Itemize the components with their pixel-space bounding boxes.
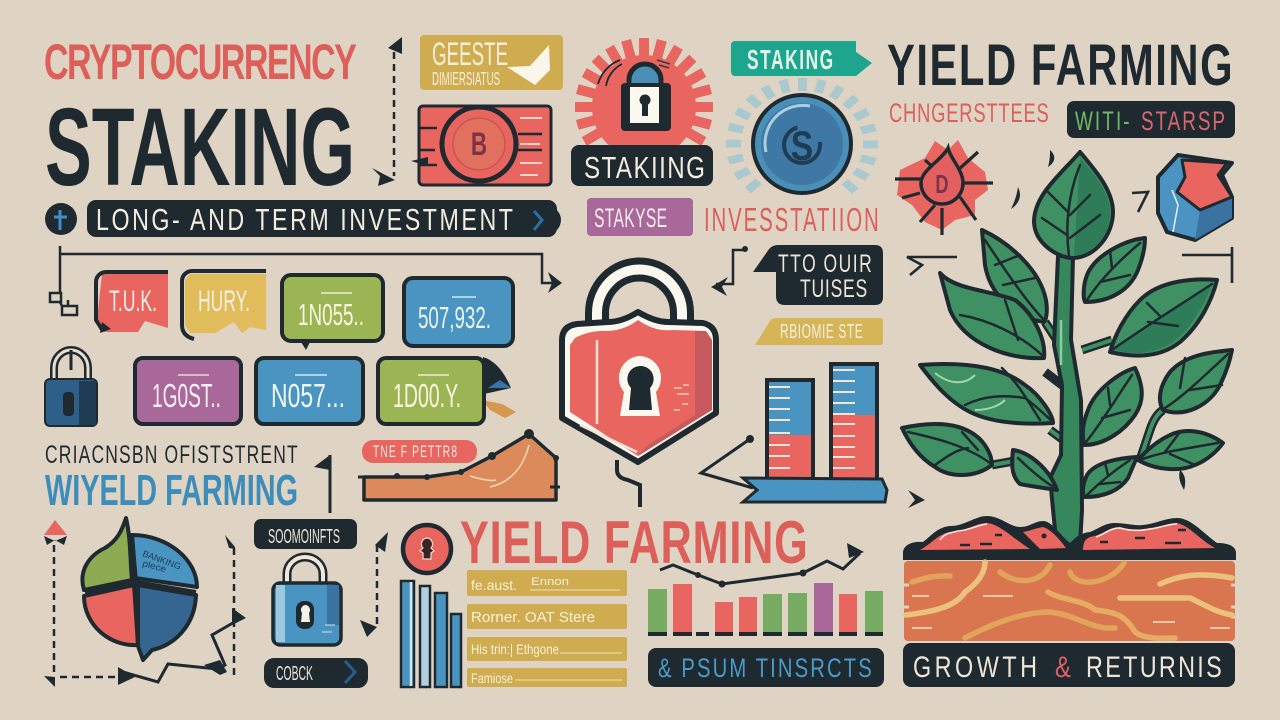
banner: long and term investment: LONG- AND TERM INVESTMENT bbox=[96, 202, 513, 237]
speech bubble: to our tuises: TTO OUIR bbox=[778, 249, 872, 278]
strips: gold text rows: Rorner. OAT Stere bbox=[471, 609, 595, 626]
strips: gold text rows bbox=[467, 570, 627, 687]
pill: with stars: WITI- bbox=[1075, 106, 1130, 136]
bubble: blue second: N057... bbox=[271, 377, 345, 414]
arrow: dashed right bbox=[360, 532, 388, 637]
connector: line to bubbles bbox=[50, 246, 562, 315]
plant branches bbox=[992, 322, 1163, 500]
leaf: upper left bbox=[982, 230, 1047, 322]
pill: stakiing: STAKIING bbox=[584, 150, 705, 185]
ribbon base bbox=[743, 478, 887, 502]
tag: staking teal: STAKING bbox=[747, 44, 833, 75]
strips: gold text rows: His trin:| Ethgone bbox=[471, 641, 559, 657]
icon: red sun with padlock bbox=[575, 38, 713, 159]
strips: gold text rows: fe.aust. bbox=[471, 577, 517, 593]
leaf: far right top bbox=[1160, 350, 1232, 412]
tag: gold regime site: RBIOMIE STE bbox=[780, 321, 863, 343]
title: cryptocurrency: CRYPTOCURRENCY bbox=[44, 35, 357, 91]
badge: gold label bbox=[420, 35, 563, 90]
flag arrow bbox=[314, 455, 330, 513]
icon: red burst with drop coin bbox=[895, 140, 993, 235]
arrow: dashed vertical bbox=[372, 37, 402, 186]
tag: stakyse bbox=[587, 198, 693, 236]
chart: line with arrow bbox=[660, 543, 864, 588]
chart: pie with leaf: plece bbox=[141, 558, 167, 574]
pill: soomoinfts bbox=[254, 519, 357, 549]
bubble: green second: 1D00.Y. bbox=[393, 377, 461, 414]
pill: growth and returns: & bbox=[1055, 649, 1071, 684]
arrow: zigzag bbox=[118, 608, 246, 685]
bubble: purple: 1G0ST.. bbox=[152, 377, 221, 414]
decor arrows around plant bbox=[907, 150, 1233, 508]
bubble: gold bbox=[182, 271, 266, 339]
pill: cobck bbox=[264, 658, 368, 688]
leaf: right lower bbox=[1083, 457, 1137, 497]
icon: blue padlock bbox=[273, 557, 341, 645]
chart: colored bars bbox=[648, 583, 883, 635]
label: chngersttees: CHNGERSTTEES bbox=[889, 97, 1049, 128]
chart: stacked cylinders bbox=[743, 364, 887, 502]
chart: blue vertical bars bbox=[401, 581, 461, 687]
pill: cobck: COBCK bbox=[276, 663, 313, 685]
icon: red burst with drop coin: D bbox=[935, 170, 949, 199]
bubble: gold: HURY. bbox=[198, 285, 250, 318]
strips: gold text rows: Famiose bbox=[471, 670, 513, 686]
speech bubble: to our tuises bbox=[753, 245, 883, 305]
icon: red banknote with bitcoin coin: B bbox=[471, 126, 487, 162]
leaf: top bbox=[1034, 152, 1113, 258]
leaf: far left bbox=[902, 424, 992, 475]
heading: staking: STAKING bbox=[45, 86, 355, 209]
chart: pie with leaf: BANKING bbox=[141, 548, 182, 572]
pill: time of pettrs bbox=[362, 440, 477, 463]
icon: blue box with red arrow bbox=[1158, 155, 1232, 240]
arrow: dashed vertical middle bbox=[225, 535, 235, 678]
bubble: blue bbox=[404, 278, 513, 346]
icon: hat marker bbox=[482, 357, 516, 418]
pill: growth and returns: GROWTH bbox=[913, 650, 1037, 684]
illustration: plant bbox=[902, 152, 1232, 545]
title: yield farming top right: YIELD FARMING bbox=[887, 32, 1233, 98]
bubble: green: 1N055.. bbox=[298, 297, 364, 332]
bubble: green bbox=[282, 275, 383, 350]
icon: red banknote with bitcoin coin bbox=[411, 106, 551, 185]
label: comparison of investment: CRIACNSBN OFISTSTRENT bbox=[45, 440, 298, 469]
tag: staking teal bbox=[731, 41, 872, 76]
leaf: middle left bbox=[920, 364, 1053, 424]
icon: plus badge bbox=[45, 203, 77, 235]
icon: red medal with keyhole bbox=[403, 525, 451, 573]
icon: blue coin with rays: S bbox=[791, 124, 813, 170]
heading: wiyeld farming: WIYELD FARMING bbox=[45, 466, 298, 515]
pill: time of pettrs: TNE F PETTR8 bbox=[373, 441, 457, 461]
bubble: green second bbox=[378, 358, 484, 424]
leaf: right middle bbox=[1083, 368, 1142, 445]
chart: pie with leaf bbox=[82, 518, 197, 660]
tag: gold regime site bbox=[755, 318, 883, 345]
soil strata bbox=[904, 561, 1235, 641]
speech bubble: to our tuises: TUISES bbox=[800, 274, 867, 303]
leaf: second right bbox=[1110, 279, 1217, 356]
pill: psum tinsrcts: & PSUM TINSRCTS bbox=[658, 653, 872, 684]
icon: small padlock bbox=[45, 350, 97, 426]
pill: with stars bbox=[1067, 101, 1235, 138]
soil mound bbox=[903, 516, 1236, 560]
illustration: central padlock bbox=[562, 269, 716, 462]
pill: growth and returns: RETURNIS bbox=[1086, 650, 1222, 684]
pill: growth and returns bbox=[903, 643, 1235, 687]
label: investatiion: INVESSTATIION bbox=[704, 201, 879, 238]
leaf: upper right bbox=[1084, 238, 1145, 302]
badge: gold label: DIMIERSIATUS bbox=[432, 69, 500, 89]
badge: gold label: GEESTE bbox=[432, 36, 508, 72]
pill: with stars: STARSP bbox=[1141, 106, 1225, 136]
leaf: small left bbox=[1012, 450, 1057, 490]
arrow: to padlock bbox=[711, 246, 748, 296]
bubble: blue second bbox=[256, 358, 363, 424]
bubble: purple bbox=[135, 358, 241, 424]
icon: blue coin with rays bbox=[726, 78, 878, 194]
tag: stakyse: STAKYSE bbox=[594, 203, 667, 233]
arrow: to chart bbox=[701, 435, 754, 488]
plant stem bbox=[1050, 256, 1082, 545]
arrow: red triangle dashed axis bbox=[44, 520, 118, 687]
chart: area growth bbox=[358, 429, 560, 500]
bubble: red: T.U.K. bbox=[109, 285, 157, 318]
pill: soomoinfts: SOOMOINFTS bbox=[268, 526, 340, 548]
bubble: red bbox=[96, 272, 168, 333]
heading: yield farming red: YIELD FARMING bbox=[460, 510, 808, 577]
bubble: blue: 507,932. bbox=[418, 300, 491, 335]
wire under padlock bbox=[617, 460, 640, 507]
leaf: far right lower bbox=[1138, 431, 1223, 469]
leaf: second left bbox=[940, 273, 1044, 358]
strips: gold text rows: Ennon bbox=[531, 576, 569, 588]
